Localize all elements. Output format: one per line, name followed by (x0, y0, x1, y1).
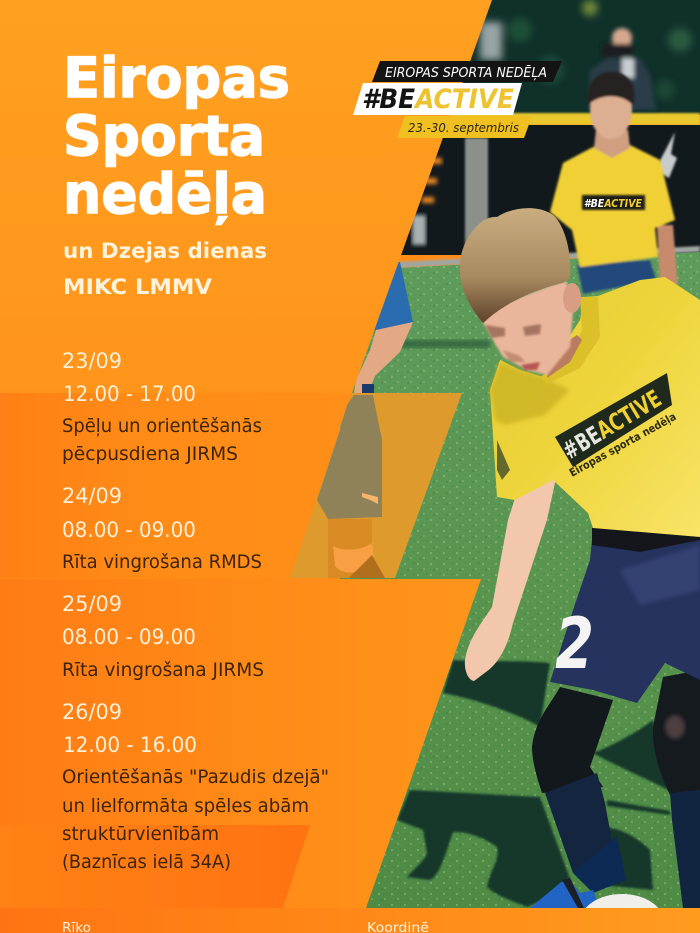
arm (465, 478, 556, 681)
panel: translucent slanted band (0, 393, 462, 578)
subtitle: un Dzejas dienas (63, 239, 267, 263)
schedule: 23/09: pēcpusdiena JIRMS (62, 443, 238, 465)
photo: football field background (340, 0, 700, 933)
schedule: 25/09 (62, 592, 264, 681)
shirt (490, 277, 700, 537)
shirt logo: #BEACTIVE (558, 384, 666, 465)
hair (460, 208, 570, 323)
badge: European Week of Sport: 23.-30. septembris (408, 121, 519, 135)
panel: lower slanted orange panel (0, 579, 481, 908)
spectator in the background (588, 28, 656, 110)
title: Eiropas (63, 46, 290, 110)
faded boy legs in overlay (317, 395, 385, 578)
schedule: 23/09: 12.00 - 17.00 (63, 382, 196, 406)
schedule: 24/09 (62, 484, 262, 573)
ball (580, 894, 664, 933)
schedule: 24/09: 24/09 (62, 484, 122, 508)
neck and face (547, 335, 582, 378)
badge: European Week of Sport: EIROPAS SPORTA NEDĒĻA (385, 66, 547, 81)
badge: European Week of Sport (353, 61, 562, 138)
shirt logo text: #BEACTIVE (584, 197, 642, 210)
schedule: 25/09: Rīta vingrošana JIRMS (62, 659, 264, 681)
shoe (530, 878, 600, 908)
shorts (550, 530, 700, 703)
title (63, 46, 290, 226)
schedule: 23/09: 23/09 (62, 349, 122, 373)
background boy in yellow shirt (550, 72, 678, 294)
schedule: 25/09: 08.00 - 09.00 (62, 625, 196, 649)
shirt collar (540, 297, 600, 384)
schedule: 23/09: Spēļu un orientēšanās (62, 415, 262, 437)
schedule: 26/09: un lielformāta spēles abām (62, 795, 309, 817)
panel: footer strip (0, 908, 700, 933)
schedule: 26/09: 12.00 - 16.00 (63, 733, 197, 757)
panel: main orange slanted panel (0, 0, 492, 578)
schedule: 26/09: Orientēšanās "Pazudis dzejā" (62, 766, 329, 788)
blue-shirted boy behind overlay: arm and sleeve (354, 262, 413, 394)
schedule: 26/09: struktūrvienībām (62, 823, 219, 845)
subtitle: MIKC LMMV (63, 275, 213, 299)
panel: darker lower accent (0, 825, 310, 908)
badge: European Week of Sport: #BEACTIVE (362, 84, 515, 115)
schedule: 26/09: 26/09 (62, 700, 122, 724)
schedule: 24/09: 08.00 - 09.00 (62, 518, 196, 542)
shirt logo: Eiropas sporta nedēļa (567, 410, 678, 480)
schedule: 26/09 (62, 700, 329, 873)
schedule: 26/09: (Baznīcas ielā 34A) (62, 851, 231, 873)
schedule: 24/09: Rīta vingrošana RMDS (62, 551, 262, 573)
schedule: 23/09 (62, 349, 262, 465)
main boy dribbling (397, 208, 700, 933)
grass shadows (397, 660, 670, 907)
shorts number: 2 (555, 603, 594, 685)
subtitle (63, 239, 267, 299)
title: Sporta (63, 104, 265, 168)
legs (653, 670, 700, 796)
title: nedēļa (63, 162, 267, 226)
schedule: 25/09: 25/09 (62, 592, 122, 616)
